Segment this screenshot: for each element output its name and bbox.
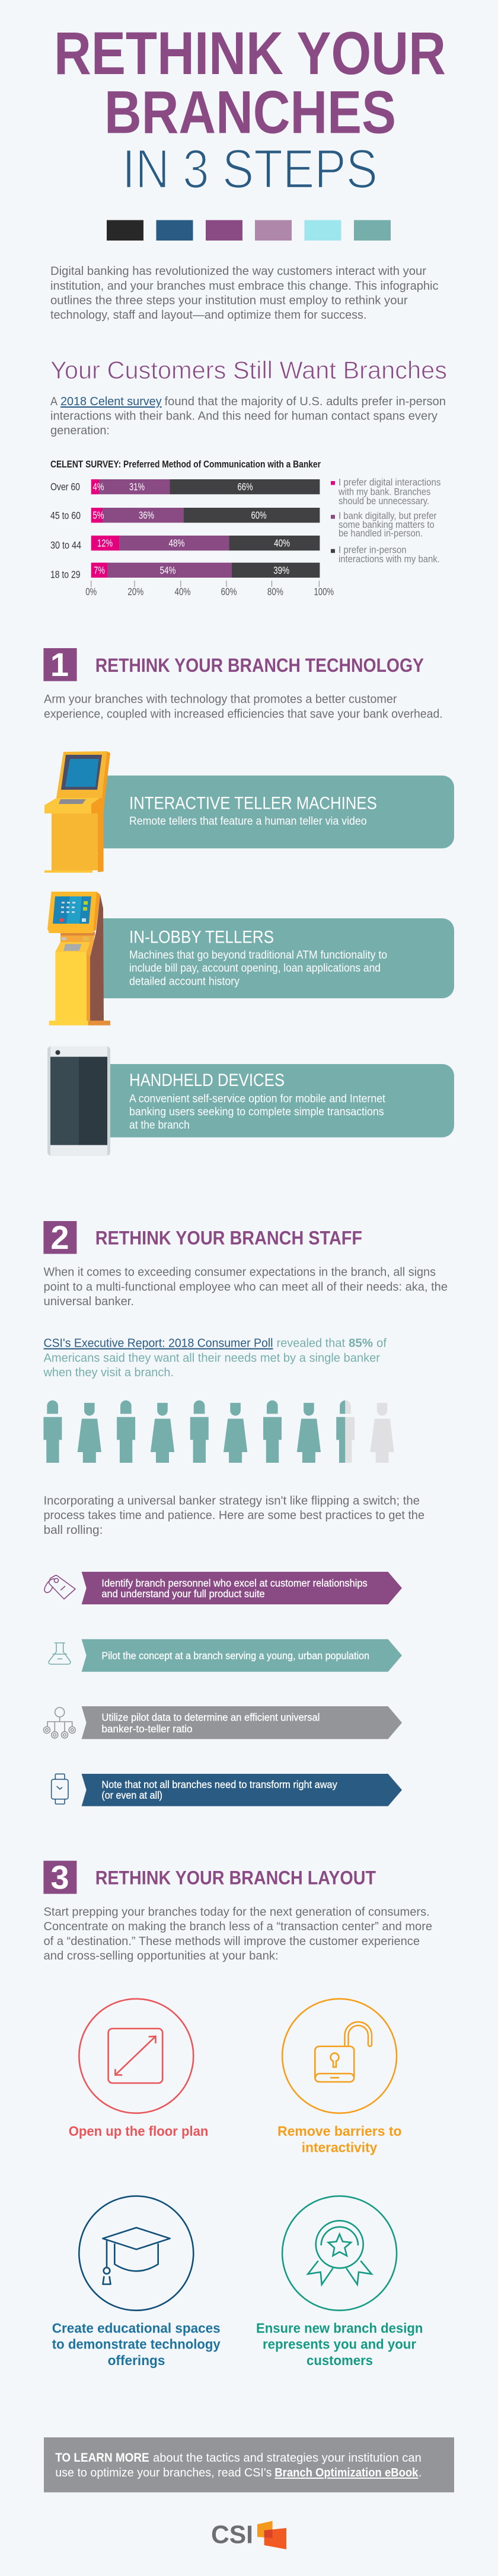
consumer poll statistic: of [376, 1337, 387, 1350]
chart legend: with my bank. Branches [338, 486, 430, 497]
x axis [85, 581, 334, 597]
row: 45 to 60: 5% [92, 510, 104, 521]
x axis: 60% [221, 585, 237, 597]
survey paragraph: generation: [50, 424, 110, 437]
chart legend [331, 477, 440, 565]
step 1 paragraph [44, 693, 443, 721]
best practices intro: process takes time and patience. Here are some best practices to get the [44, 1508, 424, 1522]
step 3 number badge: 3 [50, 1859, 69, 1896]
consumer poll statistic: when they visit a branch. [43, 1366, 174, 1379]
title [54, 20, 446, 200]
panel: handheld devices: at the branch [129, 1119, 190, 1132]
label: ensure new branch design: customers [307, 2353, 373, 2368]
row: 45 to 60: 36% [139, 510, 154, 521]
step 3 heading: RETHINK YOUR BRANCH LAYOUT [95, 1867, 376, 1889]
panel: in-lobby tellers: include bill pay, account opening, loan applications and [129, 962, 381, 975]
step 1 heading: RETHINK YOUR BRANCH TECHNOLOGY [95, 655, 424, 676]
row: 30 to 44: 48% [168, 537, 185, 549]
chart legend: some banking matters to [339, 520, 435, 530]
intro text: Digital banking has revolutionized the way customers interact with your [50, 264, 426, 278]
row: over 60 [50, 479, 320, 494]
row: 18 to 29: 18 to 29 [50, 569, 81, 581]
panel: handheld devices: HANDHELD DEVICES [129, 1071, 285, 1090]
row: 30 to 44: 12% [97, 537, 113, 549]
row: over 60: 31% [129, 481, 145, 493]
label: remove barriers: interactivity [302, 2140, 378, 2155]
intro text: technology, staff and layout—and optimize them for success. [50, 308, 366, 322]
icon: handheld phone [47, 1046, 110, 1156]
icon: watch [52, 1774, 68, 1804]
best practices intro [44, 1494, 424, 1537]
row: 30 to 44 [50, 536, 320, 551]
panel: in-lobby tellers [101, 918, 454, 998]
row: 18 to 29: 54% [160, 564, 175, 576]
icon: graduation cap [79, 2196, 193, 2311]
stacked bar chart [50, 479, 334, 597]
step 1 number badge: 1 [50, 646, 69, 683]
title: IN 3 STEPS [122, 138, 378, 200]
icon: org network [44, 1707, 75, 1738]
step 2 paragraph: point to a multi-functional employee who can meet all of their needs: aka, the [44, 1280, 448, 1294]
step 2 paragraph: universal banker. [44, 1295, 134, 1308]
label: ensure new branch design: Ensure new branch design [256, 2321, 423, 2336]
x axis: 80% [267, 585, 283, 597]
chart legend: be handled in-person. [339, 528, 423, 539]
arrow: not all branches [82, 1774, 402, 1806]
x axis: 0% [85, 585, 97, 597]
row: 18 to 29 [50, 563, 320, 581]
best practices intro: ball rolling: [44, 1523, 103, 1537]
step 2 number badge [43, 1219, 76, 1256]
panel: interactive teller machines [103, 776, 454, 848]
chart legend: interactions with my bank. [339, 554, 440, 565]
consumer poll statistic: Americans said they want all their needs met by a single banker [44, 1351, 380, 1365]
consumer poll statistic: revealed that [276, 1337, 345, 1350]
icon: unlocked padlock [282, 1999, 397, 2113]
arrow: identify personnel: and understand your full product suite [101, 1588, 265, 1600]
step 2 paragraph: When it comes to exceeding consumer expectations in the branch, all signs [44, 1265, 436, 1279]
icon: flask [49, 1643, 71, 1664]
survey paragraph: found that the majority of U.S. adults prefer in-person [165, 395, 446, 408]
step 3 paragraph [44, 1905, 432, 1963]
icon: in-lobby kiosk [47, 892, 110, 1026]
row: 18 to 29: 39% [273, 564, 289, 576]
row: over 60: Over 60 [50, 481, 80, 493]
intro text: institution, and your branches must embrace this change. This infographic [50, 279, 439, 293]
label: create educational spaces [52, 2321, 221, 2368]
row: over 60: 4% [92, 481, 104, 493]
row: 45 to 60: 60% [251, 510, 267, 521]
best practices intro: Incorporating a universal banker strategy isn't like flipping a switch; the [44, 1494, 420, 1507]
icon: name tag [44, 1575, 75, 1599]
step 1 number badge [43, 646, 77, 683]
survey paragraph: 2018 Celent survey [60, 395, 162, 408]
step 3 paragraph: Concentrate on making the branch less of a “transaction center” and more [44, 1920, 432, 1933]
label: create educational spaces: to demonstrate technology [52, 2337, 221, 2352]
panel: in-lobby tellers: Machines that go beyond traditional ATM functionality to [129, 949, 387, 962]
intro text: outlines the three steps your institution must employ to rethink your [50, 294, 408, 307]
arrow: identify personnel: Identify branch personnel who excel at customer relationships [101, 1577, 368, 1589]
heading: customers still want branches: Your Customers Still Want Branches [50, 356, 447, 384]
panel: handheld devices [110, 1064, 454, 1138]
panel: in-lobby tellers: IN-LOBBY TELLERS [129, 928, 274, 947]
chart legend: I bank digitally, but prefer [339, 511, 437, 521]
survey paragraph: A [50, 395, 58, 408]
survey paragraph [50, 395, 446, 437]
arrow: not all branches: (or even at all) [101, 1789, 162, 1801]
arrow: identify personnel [82, 1572, 402, 1604]
panel: in-lobby tellers: detailed account history [129, 976, 240, 988]
x axis: 20% [127, 585, 143, 597]
callout: learn more: . [419, 2466, 422, 2479]
title: BRANCHES [104, 78, 396, 146]
callout: learn more: Branch Optimization eBook [274, 2466, 419, 2479]
step 1 paragraph: experience, coupled with increased efficiencies that save your bank overhead. [44, 707, 443, 721]
pictogram: 85 percent of people [43, 1401, 394, 1463]
arrow: utilize pilot data [82, 1706, 402, 1739]
callout: learn more: about the tactics and strategies your institution can [153, 2451, 422, 2465]
consumer poll statistic: 85% [349, 1337, 373, 1350]
consumer poll statistic: CSI's Executive Report: 2018 Consumer Poll [44, 1337, 273, 1350]
step 2 paragraph [44, 1265, 448, 1308]
row: 30 to 44: 40% [274, 537, 290, 549]
row: 45 to 60 [50, 508, 320, 523]
step 3 paragraph: and cross-selling opportunities at your bank: [44, 1949, 279, 1963]
step 2 number badge: 2 [50, 1219, 69, 1256]
label: create educational spaces: Create educational spaces [52, 2321, 221, 2336]
label: ensure new branch design: represents you and your [263, 2337, 416, 2352]
arrow: pilot the concept: Pilot the concept at a branch serving a young, urban population [101, 1649, 369, 1661]
chart legend: I prefer in-person [339, 544, 407, 555]
step 2 heading: RETHINK YOUR BRANCH STAFF [95, 1227, 362, 1248]
callout: learn more [44, 2437, 454, 2492]
row: over 60: 66% [237, 481, 253, 493]
intro text [50, 264, 439, 322]
colour swatches [107, 220, 391, 241]
survey paragraph: interactions with their bank. And this need for human contact spans every [50, 409, 438, 423]
panel: handheld devices: banking users seeking to complete simple transactions [129, 1106, 384, 1119]
chart legend: I prefer digital interactions [339, 477, 440, 488]
callout: learn more: use to optimize your branches, read CSI's [55, 2466, 272, 2479]
icon: interactive teller kiosk [44, 751, 110, 873]
logo: CSI: CSI [211, 2520, 253, 2549]
label: create educational spaces: offerings [108, 2353, 165, 2368]
arrow: utilize pilot data: banker-to-teller ratio [101, 1723, 193, 1735]
consumer poll statistic [43, 1337, 387, 1379]
arrow: utilize pilot data: Utilize pilot data to determine an efficient universal [101, 1712, 320, 1723]
arrow: pilot the concept [82, 1639, 402, 1672]
panel: interactive teller machines: Remote tellers that feature a human teller via video [129, 815, 367, 828]
step 1 paragraph: Arm your branches with technology that promotes a better customer [44, 693, 397, 706]
row: 30 to 44: 30 to 44 [50, 539, 81, 551]
chart legend: should be unnecessary. [339, 496, 429, 507]
label: remove barriers [277, 2123, 402, 2155]
x axis: 100% [314, 585, 334, 597]
icon: award ribbon [282, 2196, 397, 2311]
row: 45 to 60: 45 to 60 [50, 510, 81, 521]
label: open up the floor plan: Open up the floor plan [69, 2123, 208, 2139]
step 3 paragraph: of a “destination.” These methods will improve the customer experience [44, 1934, 420, 1948]
panel: interactive teller machines: INTERACTIVE TELLER MACHINES [129, 794, 377, 813]
chart title: CELENT SURVEY: Preferred Method of Communication with a Banker [50, 459, 321, 470]
x axis: 40% [174, 585, 191, 597]
panel: handheld devices: A convenient self-service option for mobile and Internet [129, 1093, 386, 1106]
step 3 paragraph: Start prepping your branches today for the next generation of consumers. [44, 1905, 430, 1918]
logo: CSI [211, 2520, 286, 2549]
label: remove barriers: Remove barriers to [277, 2123, 402, 2139]
label: ensure new branch design [256, 2321, 423, 2368]
step 3 number badge [43, 1859, 76, 1896]
icon: open floor plan [79, 1999, 193, 2113]
callout: learn more: TO LEARN MORE [55, 2451, 149, 2465]
arrow: not all branches: Note that not all branches need to transform right away [101, 1779, 337, 1790]
row: 18 to 29: 7% [94, 564, 105, 576]
